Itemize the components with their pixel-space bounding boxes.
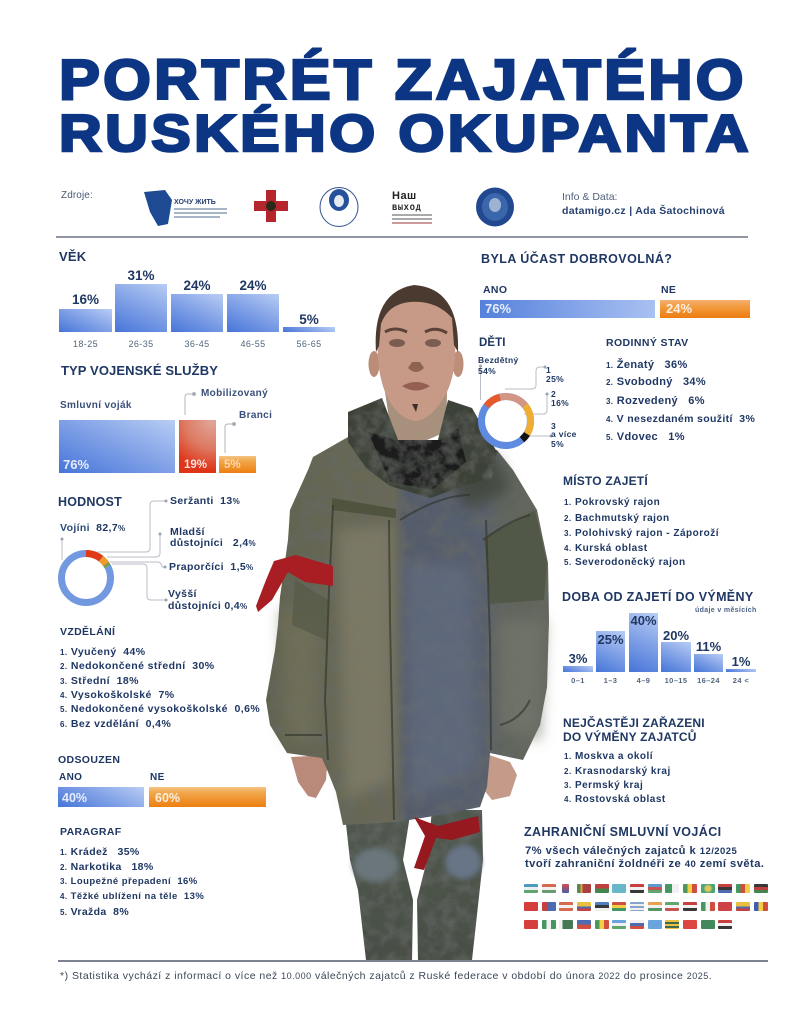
source logos bbox=[144, 187, 514, 227]
panel: byla účast dobrovolná bbox=[480, 251, 750, 318]
education list: 6. Bez vzdělání 0,4% bbox=[60, 718, 171, 730]
heading: BYLA ÚČAST DOBROVOLNÁ? bbox=[481, 252, 672, 266]
jacket panels and seams bbox=[285, 495, 547, 820]
rank labels: důstojníci 2,4% bbox=[170, 537, 256, 549]
panel: typ vojenské služby bbox=[59, 363, 272, 473]
description bbox=[525, 845, 764, 870]
heading: HODNOST bbox=[58, 495, 122, 509]
panel: hodnost bbox=[58, 495, 256, 612]
exchange region list: 3. Permský kraj bbox=[564, 780, 643, 791]
logo: Nash vykhod: Наш bbox=[392, 190, 417, 202]
stacked bars: 76% bbox=[63, 457, 89, 472]
children labels: 16% bbox=[551, 398, 569, 408]
education list: 5. Nedokončené vysokoškolské 0,6% bbox=[60, 703, 260, 715]
children labels: 1 bbox=[546, 365, 551, 375]
panel: paragraf bbox=[60, 826, 204, 918]
children labels: 54% bbox=[478, 366, 496, 376]
bar chart: time to exchange: 4–9 bbox=[637, 676, 650, 685]
service labels bbox=[60, 388, 272, 421]
capture location list: 5. Severodoněcký rajon bbox=[564, 557, 686, 568]
bar chart: time to exchange: 1% bbox=[732, 654, 750, 669]
title: PORTRÉT ZAJATÉHO bbox=[59, 48, 747, 112]
bar chart: age bbox=[59, 268, 335, 349]
heading: ZAHRANIČNÍ SMLUVNÍ VOJÁCI bbox=[524, 825, 722, 839]
yes/no bars: 40% bbox=[62, 791, 87, 805]
yes/no bars: ANO bbox=[483, 284, 507, 296]
rank labels: Mladší bbox=[170, 526, 205, 538]
stacked bars bbox=[59, 420, 256, 473]
jacket bbox=[266, 437, 549, 825]
marital status list: 1. Ženatý 36% bbox=[606, 359, 688, 371]
bar chart: time to exchange bbox=[563, 613, 756, 685]
bar chart: age: 31% bbox=[127, 268, 155, 283]
bar chart: time to exchange: 10–15 bbox=[665, 676, 687, 685]
heading: MÍSTO ZAJETÍ bbox=[563, 474, 648, 488]
donut chart: children bbox=[478, 364, 552, 449]
yes/no bars: NE bbox=[661, 284, 676, 296]
capture location list: 2. Bachmutský rajon bbox=[564, 513, 670, 524]
description: 7% všech válečných zajatců k 12/2025 bbox=[525, 845, 737, 857]
yes/no bars: 24% bbox=[666, 301, 692, 316]
heading: VĚK bbox=[59, 249, 86, 264]
bar chart: time to exchange: 3% bbox=[569, 651, 587, 666]
marital status list: 3. Rozvedený 6% bbox=[606, 395, 705, 407]
marital status list: 4. V nesezdaném soužití 3% bbox=[606, 413, 755, 425]
panel: děti bbox=[478, 335, 577, 449]
paragraph list: 2. Narkotika 18% bbox=[60, 861, 154, 873]
yes/no bars: ANO bbox=[59, 772, 82, 783]
title bbox=[59, 48, 752, 163]
bar chart: time to exchange: 1–3 bbox=[604, 676, 617, 685]
exchange region list: 2. Krasnodarský kraj bbox=[564, 766, 671, 777]
collar and scarf bbox=[348, 398, 497, 498]
children labels: a více bbox=[551, 429, 577, 439]
sources label: Zdroje: bbox=[61, 190, 93, 201]
panel: místo zajetí bbox=[563, 474, 719, 568]
leader lines bbox=[184, 392, 236, 453]
logo: round white emblem bbox=[320, 188, 358, 226]
panel: doba od zajetí do výměny bbox=[562, 589, 757, 685]
children labels bbox=[478, 355, 577, 449]
rank labels: Vojíni 82,7% bbox=[60, 522, 125, 534]
paragraph list: 5. Vražda 8% bbox=[60, 906, 129, 918]
bar chart: age: 5% bbox=[299, 312, 319, 327]
footnote: *) Statistika vychází z informací o více než 10.000 válečných zajatců z Ruské federace v období do února 2022 do prosince 2025. bbox=[60, 970, 712, 982]
education list: 2. Nedokončené střední 30% bbox=[60, 660, 215, 672]
note: údaje v měsících bbox=[695, 607, 757, 614]
donut chart: rank bbox=[58, 500, 168, 606]
yes/no bars bbox=[58, 772, 266, 807]
heading bbox=[563, 716, 705, 744]
bar chart: age: 18-25 bbox=[73, 339, 98, 349]
rank labels: Seržanti 13% bbox=[170, 495, 240, 507]
logo: Chochu zhit: ХОЧУ ЖИТЬ bbox=[174, 199, 216, 206]
rank labels: důstojníci 0,4% bbox=[168, 600, 247, 612]
heading: RODINNÝ STAV bbox=[606, 337, 689, 349]
heading: NEJČASTĚJI ZAŘAZENI bbox=[563, 716, 705, 730]
logo: Nash vykhod: ВЫХОД bbox=[392, 203, 422, 213]
bar chart: time to exchange: 24 < bbox=[733, 676, 749, 685]
neck bbox=[385, 392, 447, 445]
heading: DO VÝMĚNY ZAJATCŮ bbox=[563, 730, 697, 744]
bar chart: age: 24% bbox=[239, 278, 267, 293]
paragraph list: 1. Krádež 35% bbox=[60, 846, 140, 858]
education list bbox=[60, 646, 260, 730]
description: tvoří zahraniční žoldnéři ze 40 zemí světa. bbox=[525, 858, 764, 870]
bottom divider bbox=[58, 960, 768, 962]
bar chart: age: 26-35 bbox=[128, 339, 154, 349]
service labels: Mobilizovaný bbox=[201, 388, 268, 399]
service labels: Smluvní voják bbox=[60, 400, 132, 411]
title: RUSKÉHO OKUPANTA bbox=[59, 105, 752, 163]
bar chart: time to exchange: 40% bbox=[630, 613, 657, 628]
exchange region list: 1. Moskva a okolí bbox=[564, 751, 653, 762]
panel: vzdělání bbox=[60, 626, 260, 730]
bar chart: age: 46-55 bbox=[240, 339, 266, 349]
paragraph list: 3. Loupežné přepadení 16% bbox=[60, 876, 198, 887]
bar chart: age: 36-45 bbox=[184, 339, 210, 349]
logo: blue round emblem bbox=[476, 188, 514, 226]
red thigh band bbox=[414, 816, 480, 870]
heading: ODSOUZEN bbox=[58, 754, 120, 766]
hands bbox=[291, 754, 517, 800]
panel: odsouzen bbox=[58, 754, 266, 807]
marital status list: 5. Vdovec 1% bbox=[606, 431, 685, 443]
panel: nejčastěji zařazeni do výměny bbox=[563, 716, 705, 805]
education list: 4. Vysokoškolské 7% bbox=[60, 689, 174, 701]
bar chart: age: 24% bbox=[183, 278, 211, 293]
rank labels bbox=[60, 495, 256, 612]
head bbox=[368, 285, 464, 421]
exchange region list bbox=[564, 751, 671, 805]
paragraph list: 4. Těžké ublížení na těle 13% bbox=[60, 891, 204, 902]
capture location list bbox=[564, 497, 719, 568]
children labels: 3 bbox=[551, 421, 556, 431]
logo: Nash vykhod bbox=[392, 190, 432, 224]
children labels: 25% bbox=[546, 374, 564, 384]
info and data credit: datamigo.cz | Ada Šatochinová bbox=[562, 205, 725, 217]
paragraph list bbox=[60, 846, 204, 918]
heading: PARAGRAF bbox=[60, 826, 122, 838]
capture location list: 3. Polohivský rajon - Záporoží bbox=[564, 528, 719, 539]
children labels: 2 bbox=[551, 389, 556, 399]
heading: DOBA OD ZAJETÍ DO VÝMĚNY bbox=[562, 590, 754, 604]
yes/no bars: 60% bbox=[155, 791, 180, 805]
panel: rodinný stav bbox=[606, 337, 755, 443]
heading: DĚTI bbox=[479, 337, 506, 349]
capture location list: 1. Pokrovský rajon bbox=[564, 497, 660, 508]
bar chart: time to exchange: 20% bbox=[663, 628, 689, 643]
panel: zahraniční smluvní vojáci bbox=[524, 824, 768, 929]
exchange region list: 4. Rostovská oblast bbox=[564, 794, 666, 805]
bar chart: time to exchange: 16–24 bbox=[697, 676, 720, 685]
bar chart: time to exchange: 25% bbox=[597, 632, 624, 647]
top divider bbox=[56, 236, 748, 238]
info and data credit bbox=[562, 191, 725, 217]
children labels: Bezdětný bbox=[478, 355, 519, 365]
rank labels: Vyšší bbox=[168, 588, 197, 600]
red armband bbox=[256, 555, 333, 612]
service labels: Branci bbox=[239, 410, 272, 421]
heading: VZDĚLÁNÍ bbox=[60, 626, 115, 638]
rank labels: Praporčíci 1,5% bbox=[169, 561, 254, 573]
info and data credit: Info & Data: bbox=[562, 191, 617, 203]
bar chart: age: 56-65 bbox=[296, 339, 322, 349]
marital status list: 2. Svobodný 34% bbox=[606, 376, 706, 388]
panel: věk bbox=[59, 249, 335, 349]
yes/no bars: 76% bbox=[485, 301, 511, 316]
yes/no bars: NE bbox=[150, 772, 165, 783]
education list: 3. Střední 18% bbox=[60, 675, 139, 687]
logo: Chochu zhit bbox=[144, 190, 227, 226]
flag grid bbox=[524, 884, 768, 929]
logo: red cross bbox=[254, 190, 288, 222]
capture location list: 4. Kurská oblast bbox=[564, 543, 648, 554]
stacked bars: 19% bbox=[184, 459, 207, 471]
children labels: 5% bbox=[551, 439, 564, 449]
education list: 1. Vyučený 44% bbox=[60, 646, 146, 658]
heading: TYP VOJENSKÉ SLUŽBY bbox=[61, 363, 218, 378]
yes/no bars bbox=[480, 284, 750, 318]
legs bbox=[345, 810, 483, 960]
marital status list bbox=[606, 358, 755, 443]
bar chart: age: 16% bbox=[72, 292, 99, 307]
stacked bars: 5% bbox=[224, 459, 241, 471]
jacket shading bbox=[280, 455, 545, 800]
bar chart: time to exchange: 11% bbox=[696, 639, 721, 654]
bar chart: time to exchange: 0–1 bbox=[571, 676, 585, 685]
